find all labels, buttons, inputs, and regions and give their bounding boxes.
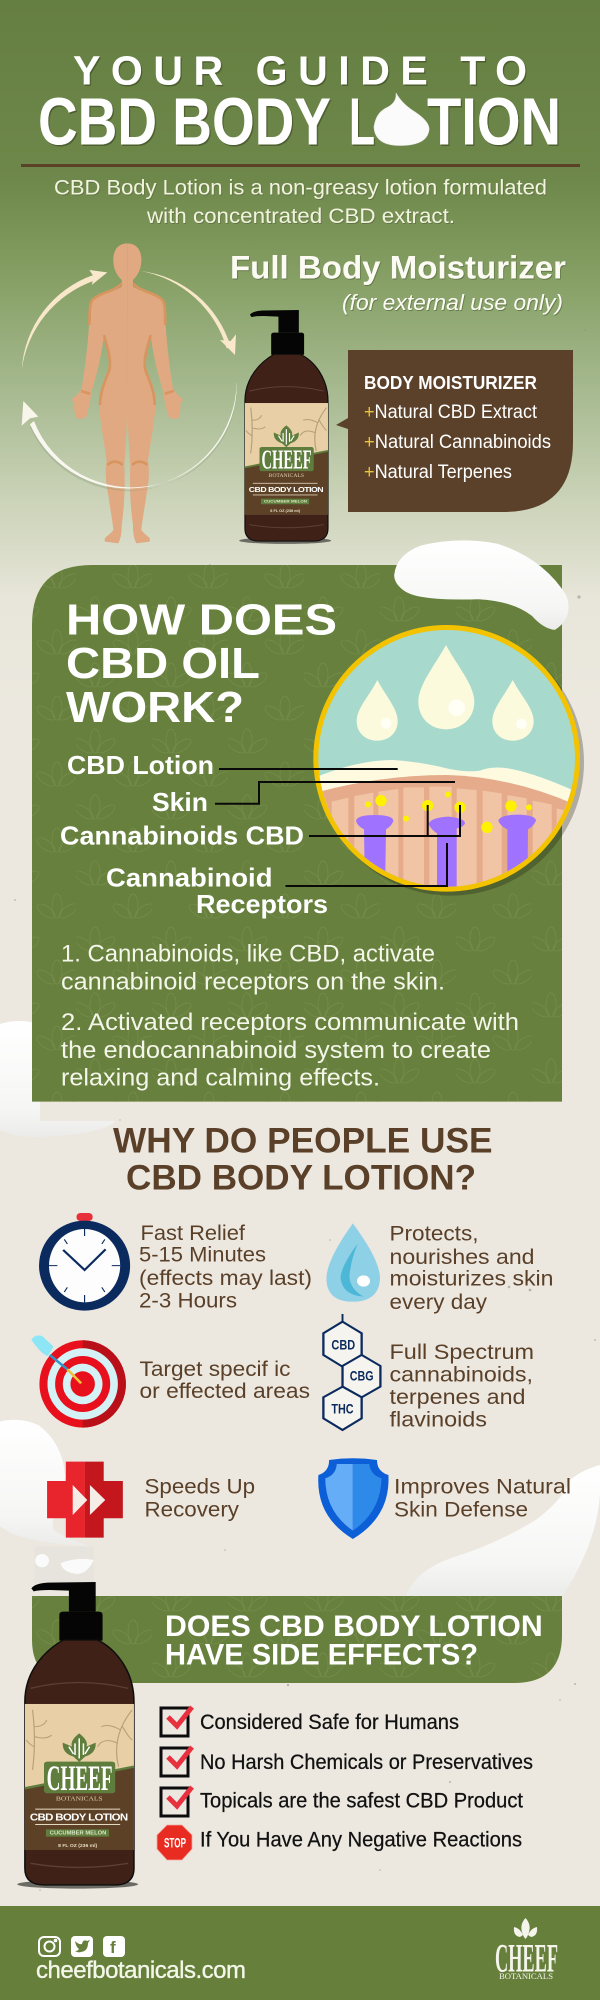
website: cheefbotanicals.com bbox=[36, 1957, 246, 1984]
checklist text: Considered Safe for Humans bbox=[200, 1711, 459, 1734]
diagram labels: Cannabinoid bbox=[106, 863, 272, 893]
diagram labels: Skin bbox=[152, 787, 208, 817]
title line two: O bbox=[386, 105, 418, 149]
arrows: circulation ring around the body bbox=[22, 270, 237, 491]
full spectrum text: flavinoids bbox=[390, 1408, 487, 1432]
icon: stopwatch bbox=[39, 1213, 130, 1311]
protects text bbox=[390, 1222, 554, 1314]
protects text: every day bbox=[390, 1290, 487, 1314]
side effects title: HAVE SIDE EFFECTS? bbox=[165, 1638, 478, 1671]
speeds up text bbox=[144, 1474, 255, 1522]
heading bbox=[66, 595, 337, 732]
icon: red cross with fast-forward bbox=[47, 1462, 123, 1538]
product bottle, top: CBD BODY LOTION bbox=[249, 486, 324, 494]
target text bbox=[140, 1357, 310, 1403]
explanation text: cannabinoid receptors on the skin. bbox=[61, 968, 445, 996]
product bottle, bottom: CHEEF bbox=[47, 1758, 113, 1798]
product bottle, top: CHEEF bbox=[262, 445, 312, 475]
lotion smear, lower left bbox=[0, 1420, 94, 1583]
explanation text: the endocannabinoid system to create bbox=[61, 1037, 491, 1064]
protects text: moisturizes skin bbox=[390, 1267, 554, 1291]
product bottle, bottom: CBD BODY LOTION bbox=[30, 1812, 128, 1823]
product bottle, top bbox=[239, 310, 331, 544]
explanation text: 1. Cannabinoids, like CBD, activate bbox=[61, 941, 435, 968]
side effects title bbox=[165, 1610, 543, 1671]
full spectrum text: cannabinoids, bbox=[390, 1363, 533, 1387]
full body moisturizer heading: (for external use only) bbox=[342, 290, 563, 315]
lotion smear, top right of panel bbox=[394, 540, 569, 630]
title line two: CBD BODY bbox=[38, 84, 331, 160]
callout heading: BODY MOISTURIZER bbox=[364, 372, 537, 393]
lotion smear, left edge bbox=[0, 1021, 116, 1137]
heading: why do people use bbox=[113, 1122, 492, 1197]
icon: instagram bbox=[39, 1937, 60, 1956]
full spectrum text bbox=[390, 1340, 534, 1432]
lotion smear, lower right bbox=[406, 1465, 600, 1596]
icon: cannabinoid hexagons: CBD bbox=[331, 1337, 355, 1353]
panel: side effects heading bbox=[32, 1596, 562, 1683]
icon: cannabinoid hexagons: CBG bbox=[350, 1369, 374, 1384]
icon: checkbox one bbox=[161, 1707, 192, 1736]
callout: body moisturizer bbox=[336, 350, 573, 512]
improves text bbox=[394, 1474, 571, 1522]
checklist text: Topicals are the safest CBD Product bbox=[200, 1790, 523, 1813]
footer bbox=[0, 1906, 600, 2000]
protects text: nourishes and bbox=[390, 1245, 534, 1269]
product bottle, bottom: BOTANICALS bbox=[56, 1796, 103, 1803]
title line two: TION bbox=[427, 84, 561, 160]
title line one: YOUR GUIDE TO bbox=[73, 48, 527, 94]
speeds up text: Speeds Up bbox=[144, 1474, 255, 1498]
checklist text bbox=[200, 1711, 533, 1852]
diagram labels: Receptors bbox=[196, 889, 328, 919]
callout list: +Natural CBD Extract bbox=[364, 402, 538, 423]
icon: facebook bbox=[103, 1936, 125, 1957]
icon: checkbox two bbox=[161, 1747, 192, 1776]
callout list bbox=[364, 402, 551, 483]
title bbox=[38, 48, 561, 160]
icon: cannabinoid hexagons: THC bbox=[331, 1401, 354, 1417]
fast relief text: (effects may last) bbox=[139, 1266, 312, 1290]
explanation text bbox=[61, 941, 519, 1092]
icon: shield bbox=[318, 1458, 389, 1539]
title line two: L bbox=[349, 84, 375, 160]
checklist text: No Harsh Chemicals or Preservatives bbox=[200, 1751, 533, 1774]
protects text: Protects, bbox=[390, 1222, 478, 1246]
intro text bbox=[54, 176, 547, 228]
icon: stop sign bbox=[157, 1825, 192, 1860]
fast relief text: Fast Relief bbox=[140, 1221, 245, 1245]
diagram labels bbox=[60, 750, 328, 919]
checklist text: If You Have Any Negative Reactions bbox=[200, 1829, 522, 1852]
full body moisturizer heading: Full Body Moisturizer bbox=[230, 250, 566, 286]
icon: water drop bbox=[326, 1223, 380, 1302]
icon: cannabinoid hexagons bbox=[323, 1314, 380, 1430]
full body moisturizer heading bbox=[230, 250, 566, 315]
checklist bbox=[157, 1707, 533, 1860]
heading: HOW DOES bbox=[66, 595, 337, 644]
callout list: +Natural Terpenes bbox=[364, 462, 512, 483]
speeds up text: Recovery bbox=[144, 1498, 239, 1522]
product bottle, bottom: 8 FL OZ (236 ml) bbox=[58, 1843, 98, 1848]
intro text: CBD Body Lotion is a non-greasy lotion formulated bbox=[54, 176, 547, 200]
explanation text: 2. Activated receptors communicate with bbox=[61, 1009, 519, 1036]
fast relief text bbox=[139, 1221, 312, 1312]
product bottle, bottom: CUCUMBER MELON bbox=[50, 1831, 107, 1836]
panel: how does CBD oil work bbox=[32, 565, 584, 1102]
full spectrum text: Full Spectrum bbox=[390, 1340, 534, 1364]
callout list: +Natural Cannabinoids bbox=[364, 432, 551, 453]
icon: lotion drops bbox=[357, 645, 534, 741]
full spectrum text: terpenes and bbox=[390, 1385, 526, 1409]
icon: stop sign: STOP bbox=[164, 1834, 186, 1850]
icon: human body figure bbox=[71, 243, 184, 543]
target text: Target specif ic bbox=[140, 1357, 291, 1381]
fast relief text: 5-15 Minutes bbox=[139, 1243, 266, 1267]
product bottle, top: BOTANICALS bbox=[269, 473, 304, 479]
heading: why do people use: WHY DO PEOPLE USE bbox=[113, 1122, 492, 1161]
diagram labels: Cannabinoids CBD bbox=[60, 820, 304, 850]
icon: target with dart bbox=[31, 1335, 126, 1428]
target text: or effected areas bbox=[140, 1379, 310, 1403]
explanation text: relaxing and calming effects. bbox=[61, 1065, 380, 1092]
diagram leader lines bbox=[215, 769, 460, 886]
icon: twitter bbox=[71, 1936, 93, 1957]
heading: why do people use: CBD BODY LOTION? bbox=[126, 1158, 476, 1197]
improves text: Skin Defense bbox=[394, 1498, 528, 1522]
logo: BOTANICALS bbox=[499, 1972, 553, 1981]
icon: checkbox three bbox=[161, 1787, 192, 1816]
product bottle, bottom bbox=[17, 1582, 138, 1889]
intro text: with concentrated CBD extract. bbox=[146, 204, 455, 228]
diagram: lotion on skin bbox=[313, 625, 584, 897]
side effects title: DOES CBD BODY LOTION bbox=[165, 1610, 543, 1643]
heading: WORK? bbox=[66, 683, 244, 732]
fast relief text: 2-3 Hours bbox=[139, 1288, 237, 1312]
product bottle, top: CUCUMBER MELON bbox=[264, 499, 307, 504]
product bottle, top: 8 FL OZ (236 ml) bbox=[270, 509, 300, 513]
improves text: Improves Natural bbox=[394, 1474, 571, 1498]
icon: facebook: f bbox=[110, 1938, 116, 1957]
logo bbox=[495, 1918, 558, 1981]
title line two bbox=[38, 84, 561, 160]
icon: lotion dollop as the letter O bbox=[374, 93, 429, 146]
heading: CBD OIL bbox=[66, 639, 260, 688]
diagram labels: CBD Lotion bbox=[67, 750, 214, 780]
